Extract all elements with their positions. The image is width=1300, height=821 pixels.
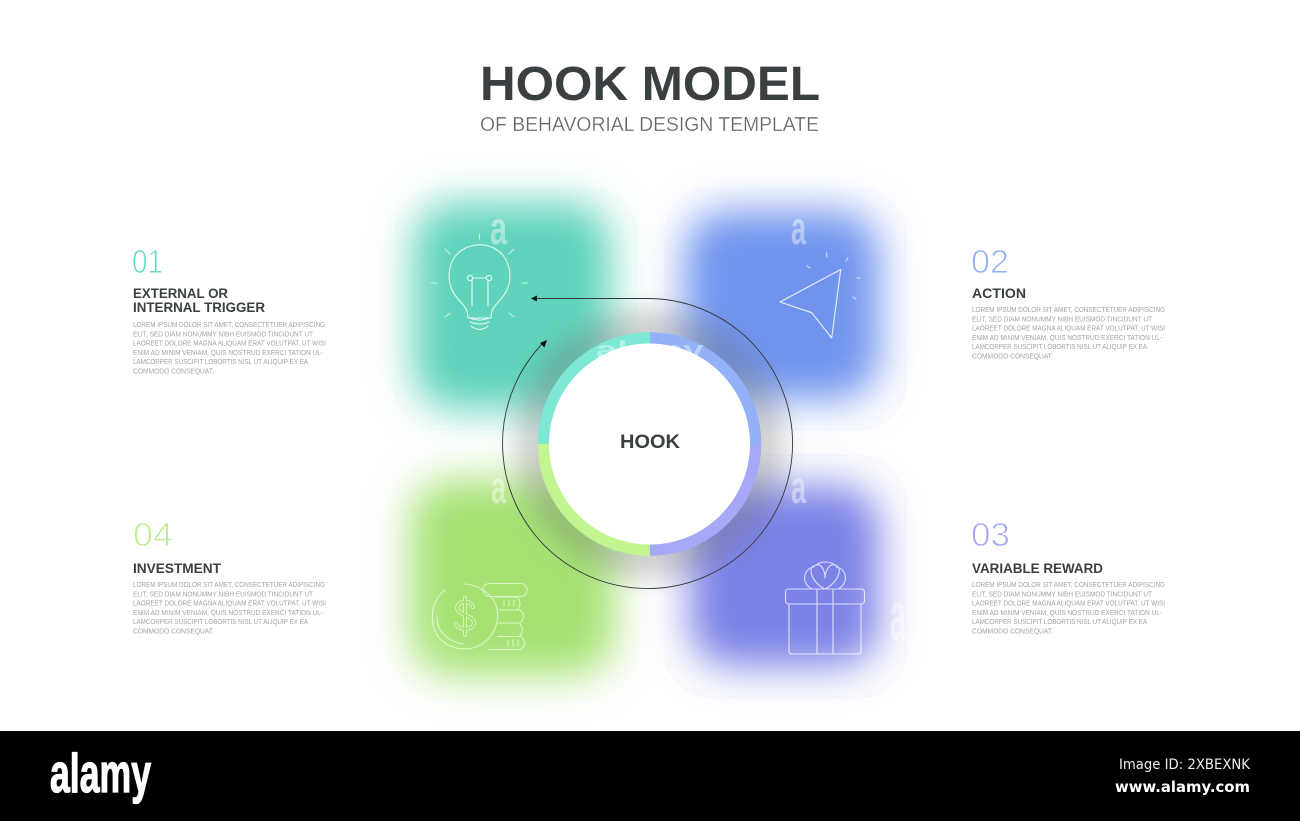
text block 04 — [133, 582, 326, 636]
text block 04: LOREM IPSUM DOLOR SIT AMET, CONSECTETUER ADIPISCING — [133, 582, 325, 589]
panel: action tile — [665, 188, 906, 430]
step 01: EXTERNAL OR — [133, 286, 228, 301]
text block 02: ELIT, SED DIAM NONUMMY NIBH EUISMOD TINCIDUNT UT — [972, 316, 1153, 324]
title — [480, 58, 820, 136]
centre disc — [549, 344, 750, 544]
step 02: 02 — [971, 243, 1009, 280]
title: HOOK MODEL — [480, 58, 820, 111]
text block 04: ENIM AD MINIM VENIAM, QUIS NOSTRUD EXERCI TATION UL- — [133, 610, 324, 617]
text block 04: LAOREET DOLORE MAGNA ALIQUAM ERAT VOLUTPAT. UT WISI — [133, 600, 326, 608]
step 03: VARIABLE REWARD — [972, 561, 1103, 576]
step 04: INVESTMENT — [133, 561, 222, 576]
icon: gift box — [786, 562, 864, 654]
text block 03: LAMCORPER SUSCIPIT LOBORTIS NISL UT ALIQUIP EX EA — [972, 619, 1147, 626]
text block 01: LAOREET DOLORE MAGNA ALIQUAM ERAT VOLUTPAT. UT WISI — [133, 340, 326, 348]
panel: trigger tile — [394, 188, 637, 430]
watermark letters: a — [491, 461, 506, 513]
text block 02: LOREM IPSUM DOLOR SIT AMET, CONSECTETUER ADIPISCING — [972, 307, 1165, 314]
text block 03 — [972, 582, 1165, 636]
text block 02: LAMCORPER SUSCIPIT LOBORTIS NISL UT ALIQUIP EX EA — [972, 344, 1147, 351]
watermark letters: a — [791, 202, 806, 254]
text block 03: LOREM IPSUM DOLOR SIT AMET, CONSECTETUER ADIPISCING — [972, 582, 1165, 589]
step 02 — [971, 243, 1165, 360]
footer logo: alamy — [50, 742, 151, 804]
text block 01: LOREM IPSUM DOLOR SIT AMET, CONSECTETUER ADIPISCING — [133, 322, 325, 329]
image id: Image ID: 2XBEXNK — [1119, 757, 1251, 773]
step 04: 04 — [133, 516, 173, 553]
text block 01: LAMCORPER SUSCIPIT LOBORTIS NISL UT ALIQUIP EX EA — [133, 359, 308, 366]
icon: light bulb — [431, 234, 528, 330]
step 03: 03 — [971, 516, 1010, 553]
text block 04: LAMCORPER SUSCIPIT LOBORTIS NISL UT ALIQUIP EX EA — [133, 619, 308, 626]
arrow: cycle orbit — [503, 296, 793, 588]
text block 02: LAOREET DOLORE MAGNA ALIQUAM ERAT VOLUTPAT. UT WISI — [972, 326, 1165, 332]
icon: coins — [432, 584, 527, 650]
website: www.alamy.com — [1115, 778, 1250, 796]
watermark on ring: alamy — [596, 337, 705, 364]
text block 01: COMMODO CONSEQUAT. — [133, 368, 214, 376]
text block 01: ELIT, SED DIAM NONUMMY NIBH EUISMOD TINCIDUNT UT — [133, 332, 314, 338]
text block 01: ENIM AD MINIM VENIAM, QUIS NOSTRUD EXERCI TATION UL- — [133, 350, 324, 357]
subtitle: OF BEHAVORIAL DESIGN TEMPLATE — [480, 114, 819, 136]
centre label: HOOK — [620, 432, 680, 453]
step 01: 01 — [132, 243, 163, 280]
footer bar — [0, 731, 1300, 821]
step 03 — [971, 516, 1165, 636]
text block 02: ENIM AD MINIM VENIAM, QUIS NOSTRUD EXERCI TATION UL- — [972, 335, 1163, 342]
circle shadow — [516, 310, 784, 578]
watermark letters: a — [490, 202, 507, 254]
step 02: ACTION — [972, 286, 1026, 301]
panel: reward tile — [665, 455, 906, 698]
text block 03: ENIM AD MINIM VENIAM, QUIS NOSTRUD EXERCI TATION UL- — [972, 610, 1163, 617]
step 04 — [133, 516, 326, 636]
watermark letters — [490, 202, 906, 655]
text block 04: ELIT, SED DIAM NONUMMY NIBH EUISMOD TINCIDUNT UT — [133, 592, 314, 598]
panel: investment tile — [394, 455, 637, 698]
text block 04: COMMODO CONSEQUAT. — [133, 628, 214, 636]
text block 03: COMMODO CONSEQUAT. — [972, 628, 1053, 636]
step 01: INTERNAL TRIGGER — [133, 300, 265, 315]
text block 01 — [133, 322, 326, 376]
centre ring — [544, 338, 756, 550]
text block 03: LAOREET DOLORE MAGNA ALIQUAM ERAT VOLUTPAT. UT WISI — [972, 600, 1165, 608]
watermark letters: a — [791, 461, 806, 513]
step 01 — [132, 243, 326, 376]
icon: paper plane cursor — [780, 253, 860, 338]
text: a — [890, 577, 906, 655]
text block 03: ELIT, SED DIAM NONUMMY NIBH EUISMOD TINCIDUNT UT — [972, 592, 1153, 598]
text block 02 — [972, 307, 1165, 360]
text block 02: COMMODO CONSEQUAT. — [972, 354, 1053, 360]
